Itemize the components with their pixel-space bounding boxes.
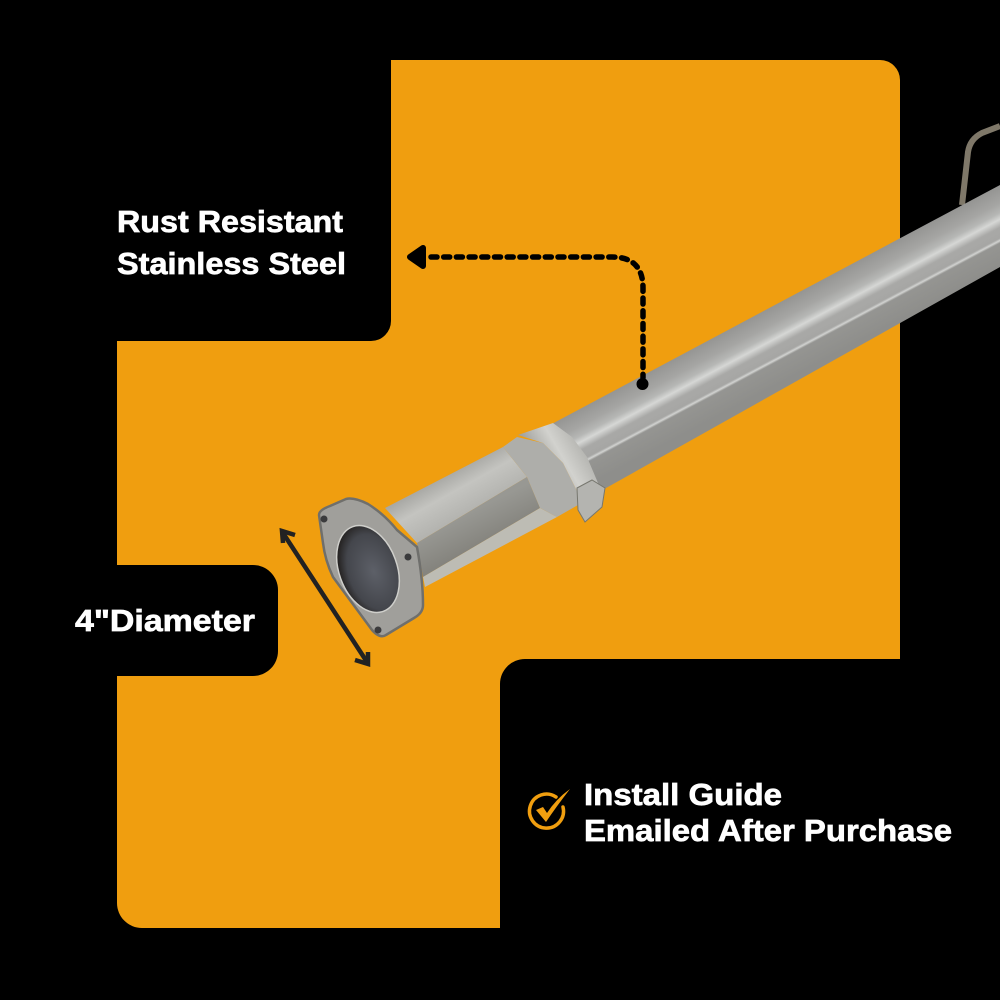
callout text: install guide: Install Guide <box>584 777 782 812</box>
product photo: exhaust pipe <box>319 126 1000 636</box>
callout text: rust resistant stainless steel: Stainless Steel <box>117 246 346 281</box>
flange bolt holes <box>320 516 412 634</box>
panel: orange background shape <box>117 60 900 928</box>
flange bore <box>325 517 411 621</box>
hanger bracket <box>962 126 1000 205</box>
front pipe top facet <box>385 447 527 543</box>
main pipe tube <box>548 185 1000 497</box>
callout text: rust resistant stainless steel: Rust Resistant <box>117 204 343 239</box>
icon: orange check mark <box>530 789 570 828</box>
flange plate <box>319 499 423 636</box>
clamp bolt <box>577 480 605 522</box>
pipe collar <box>503 437 578 517</box>
callout text: diameter: 4"Diameter <box>75 603 255 638</box>
double arrow: diameter dimension <box>282 531 368 664</box>
callout text: install guide: Emailed After Purchase <box>584 813 952 848</box>
clamp band <box>518 423 598 493</box>
front pipe lower strip <box>423 508 557 587</box>
dashed arrow pointing to callout <box>410 248 648 390</box>
front pipe middle facet <box>417 477 540 577</box>
